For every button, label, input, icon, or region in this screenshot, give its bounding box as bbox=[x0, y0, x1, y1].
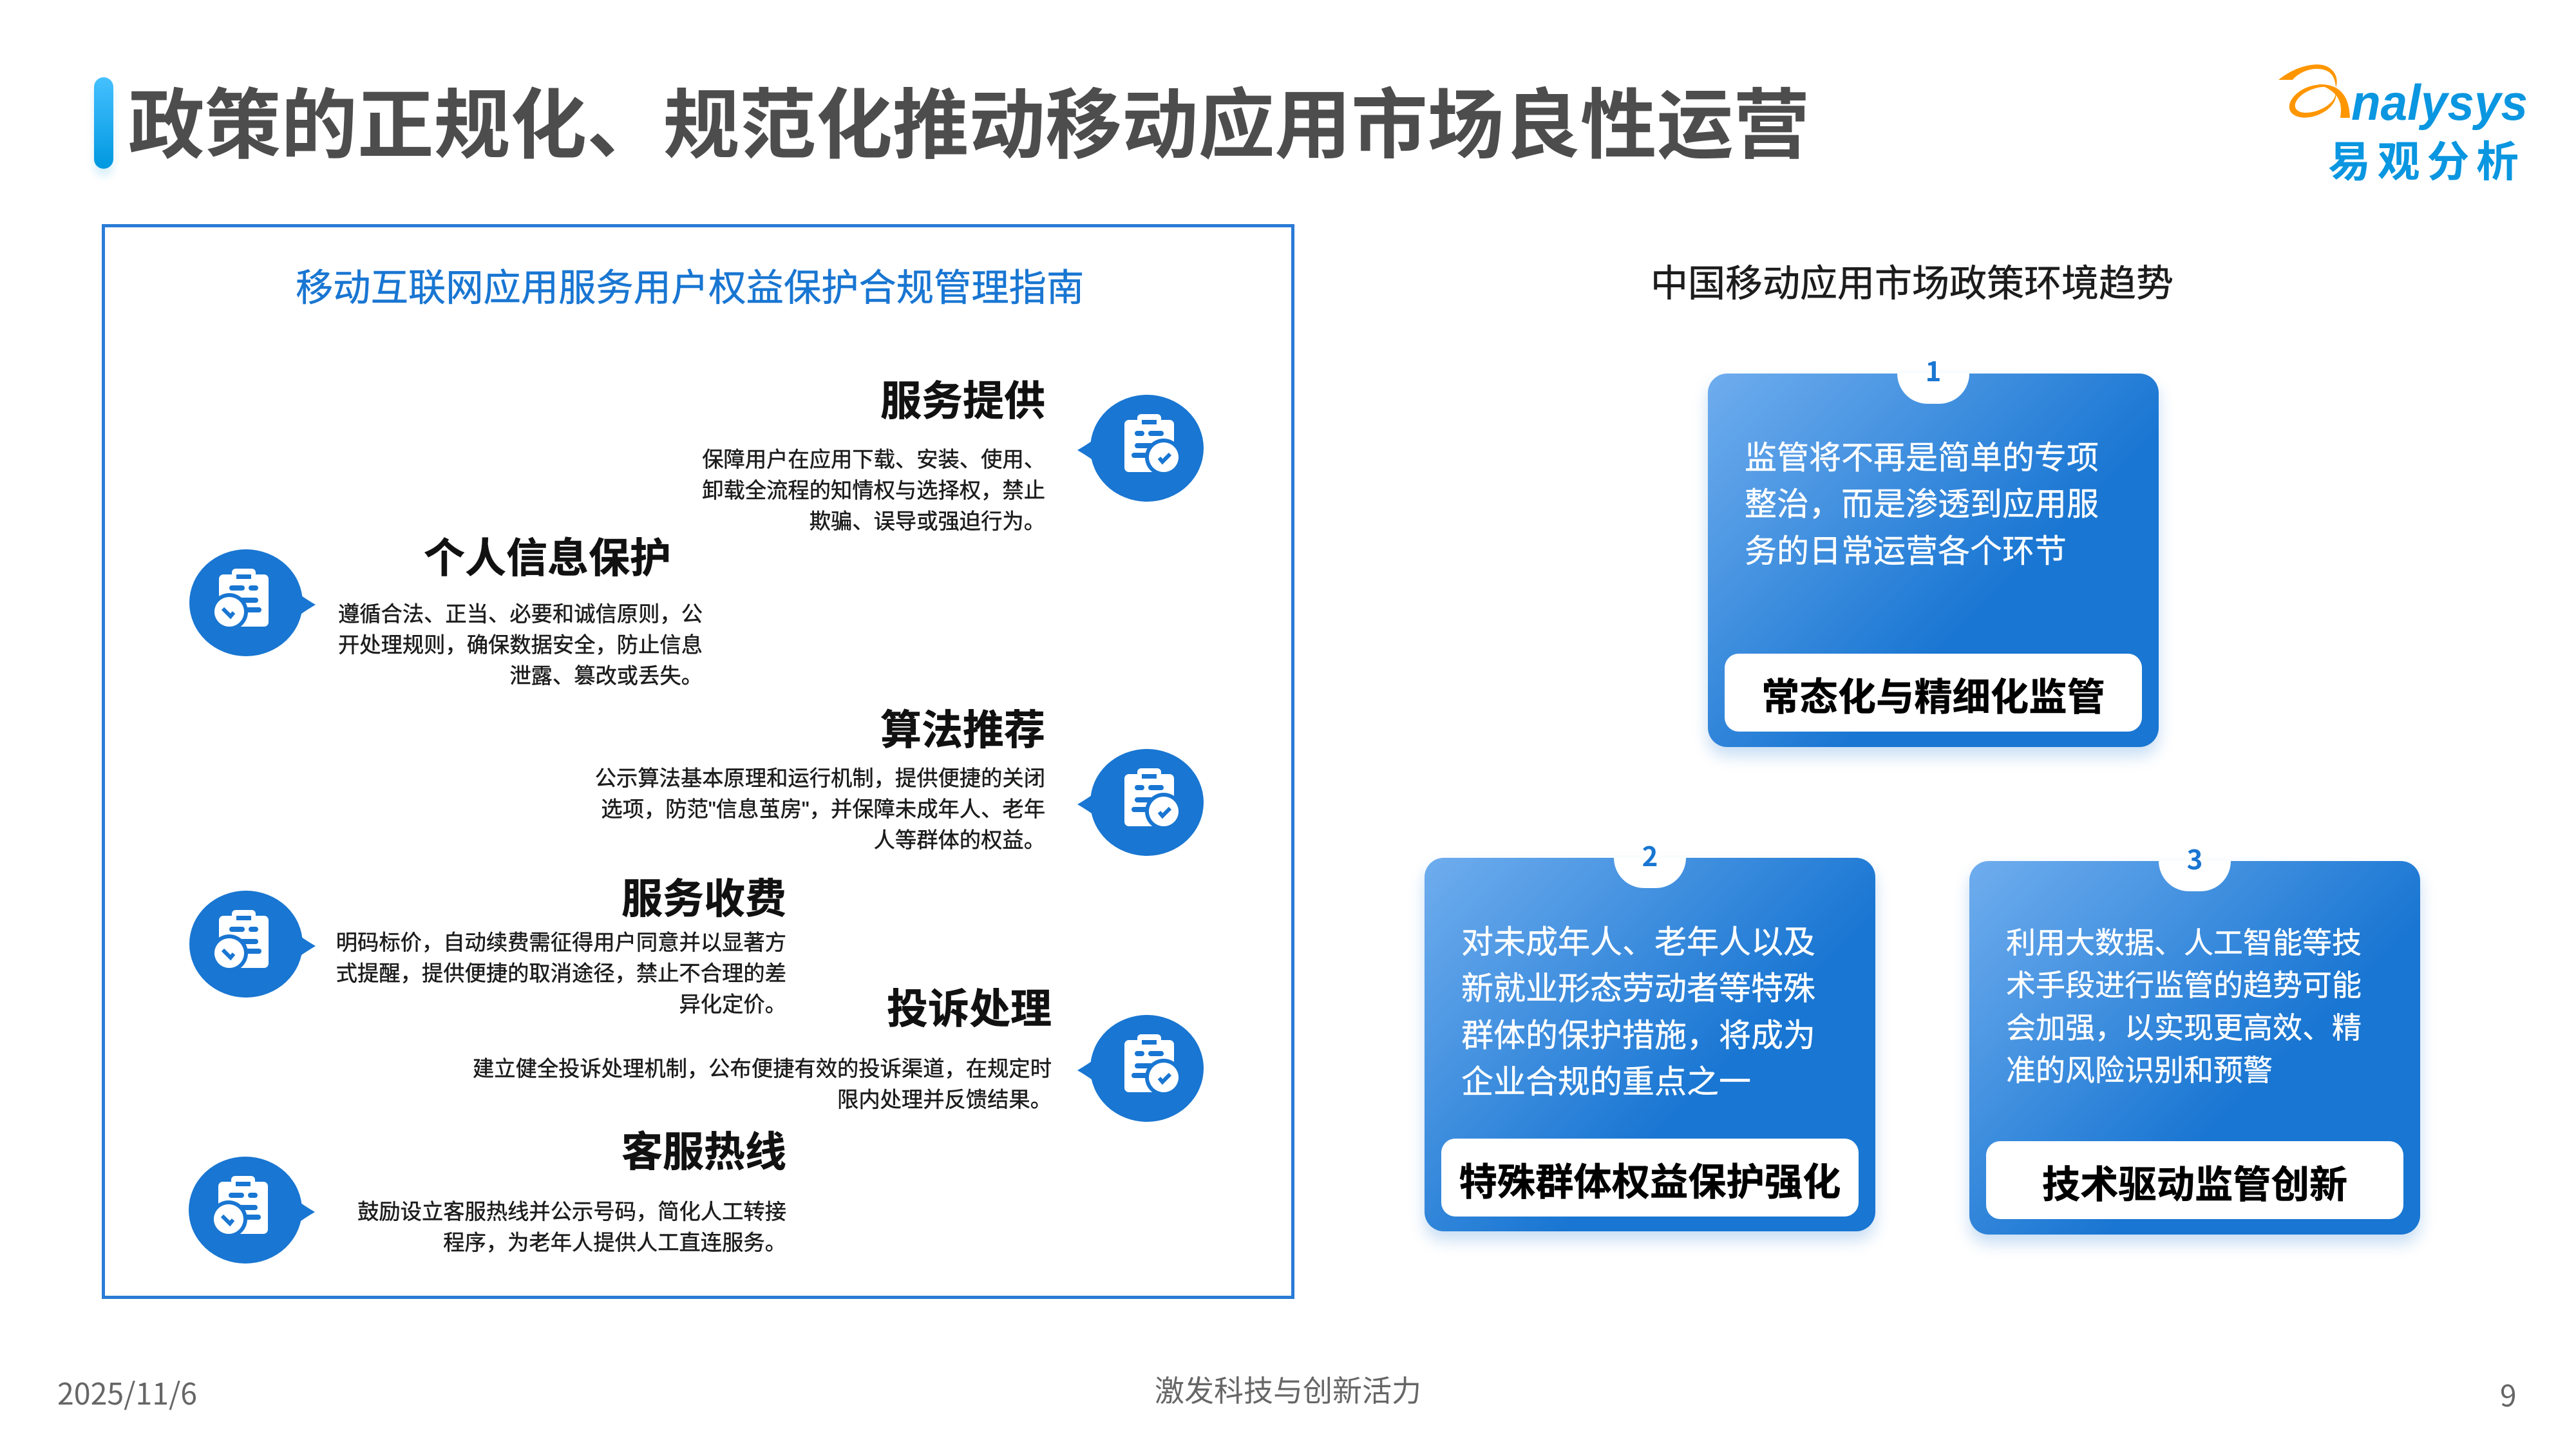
heading: 个人信息保护 bbox=[424, 535, 671, 582]
card body text: 整治，而是渗透到应用服 bbox=[1745, 486, 2099, 522]
number notch bbox=[1614, 858, 1686, 888]
card 3: 技术驱动监管创新 bbox=[1969, 861, 2420, 1235]
card body text bbox=[1461, 919, 1815, 1106]
description: 泄露、篡改或丢失。 bbox=[509, 665, 703, 688]
heading: 算法推荐 bbox=[880, 707, 1045, 753]
card body text: 新就业形态劳动者等特殊 bbox=[1461, 971, 1815, 1007]
card label: 技术驱动监管创新 bbox=[2042, 1163, 2347, 1206]
number 3: 3 bbox=[2187, 838, 2202, 878]
description: 程序，为老年人提供人工直连服务。 bbox=[443, 1231, 786, 1255]
description bbox=[335, 1197, 786, 1259]
title: 政策的正规化、规范化推动移动应用市场良性运营 bbox=[128, 84, 1810, 169]
description bbox=[335, 928, 786, 1021]
card label: 特殊群体权益保护强化 bbox=[1459, 1160, 1841, 1204]
description: 欺骗、误导或强迫行为。 bbox=[810, 510, 1045, 534]
footer date: 2025/11/6 bbox=[57, 1370, 197, 1414]
description: 人等群体的权益。 bbox=[874, 829, 1045, 853]
logo: Analysys 易观分析 bbox=[2278, 64, 2528, 185]
footer caption: 激发科技与创新活力 bbox=[1155, 1374, 1421, 1408]
card body text: 务的日常运营各个环节 bbox=[1745, 533, 2067, 569]
logo swoosh bbox=[2278, 64, 2350, 124]
item: 客服热线 bbox=[187, 1127, 789, 1269]
logo chinese name: 易观分析 bbox=[2328, 138, 2519, 185]
page number: 9 bbox=[2500, 1373, 2517, 1416]
description bbox=[580, 764, 1045, 857]
item: 个人信息保护 bbox=[189, 535, 703, 688]
card label: 常态化与精细化监管 bbox=[1761, 676, 2105, 719]
description: 限内处理并反馈结果。 bbox=[837, 1088, 1052, 1112]
card 1: 常态化与精细化监管 bbox=[1708, 374, 2159, 747]
card label bbox=[1441, 1139, 1859, 1217]
description: 开处理规则，确保数据安全，防止信息 bbox=[338, 634, 703, 658]
icon: clipboard bubble bbox=[189, 891, 316, 1001]
logo wordmark: nalysys bbox=[2351, 74, 2528, 131]
description bbox=[702, 448, 1045, 534]
number notch bbox=[1897, 374, 1969, 404]
icon: clipboard bubble bbox=[1077, 395, 1204, 502]
icon: clipboard bubble bbox=[1077, 750, 1204, 859]
description: 保障用户在应用下载、安装、使用、 bbox=[702, 448, 1045, 472]
panel heading: 移动互联网应用服务用户权益保护合规管理指南 bbox=[296, 267, 1084, 309]
icon: clipboard bubble bbox=[189, 550, 316, 659]
card body text: 准的风险识别和预警 bbox=[2006, 1054, 2273, 1087]
description: 遵循合法、正当、必要和诚信原则，公 bbox=[338, 603, 703, 627]
icon: clipboard bubble bbox=[1077, 1016, 1204, 1125]
card body text bbox=[2006, 922, 2362, 1092]
description: 明码标价，自动续费需征得用户同意并以显著方 bbox=[336, 931, 786, 955]
description: 建立健全投诉处理机制，公布便捷有效的投诉渠道，在规定时 bbox=[473, 1057, 1052, 1081]
description bbox=[334, 600, 703, 692]
icon: clipboard bubble bbox=[189, 1157, 315, 1267]
card body text: 群体的保护措施，将成为 bbox=[1461, 1018, 1815, 1054]
card label bbox=[1986, 1141, 2403, 1219]
number 1: 1 bbox=[1926, 350, 1941, 390]
heading: 服务提供 bbox=[880, 378, 1045, 424]
heading: 服务收费 bbox=[621, 876, 786, 922]
item: 投诉处理 bbox=[470, 982, 1211, 1121]
card 2: 特殊群体权益保护强化 bbox=[1425, 858, 1875, 1231]
item: 服务提供 bbox=[702, 378, 1204, 534]
description: 选项，防范"信息茧房"，并保障未成年人、老年 bbox=[601, 798, 1045, 822]
card body text bbox=[1745, 435, 2099, 574]
description: 卸载全流程的知情权与选择权，禁止 bbox=[702, 479, 1045, 503]
card body text: 利用大数据、人工智能等技 bbox=[2006, 926, 2362, 960]
item: 算法推荐 bbox=[580, 705, 1211, 863]
right section heading: 中国移动应用市场政策环境趋势 bbox=[1651, 263, 2174, 305]
card body text: 术手段进行监管的趋势可能 bbox=[2006, 969, 2362, 1002]
description: 式提醒，提供便捷的取消途径，禁止不合理的差 bbox=[336, 962, 786, 986]
heading: 客服热线 bbox=[621, 1129, 786, 1175]
title accent bar bbox=[94, 77, 113, 169]
number 2: 2 bbox=[1642, 835, 1658, 875]
heading: 投诉处理 bbox=[887, 986, 1052, 1032]
card body text: 监管将不再是简单的专项 bbox=[1745, 440, 2099, 476]
description bbox=[470, 1054, 1052, 1116]
card body text: 会加强，以实现更高效、精 bbox=[2006, 1011, 2362, 1045]
description: 鼓励设立客服热线并公示号码，简化人工转接 bbox=[357, 1200, 786, 1224]
card body text: 企业合规的重点之一 bbox=[1461, 1064, 1751, 1100]
card body text: 对未成年人、老年人以及 bbox=[1461, 924, 1815, 960]
item: 服务收费 bbox=[187, 873, 789, 1021]
number notch bbox=[2159, 861, 2231, 891]
panel: compliance guide bbox=[102, 224, 1294, 1299]
description: 公示算法基本原理和运行机制，提供便捷的关闭 bbox=[595, 767, 1045, 791]
description: 异化定价。 bbox=[679, 993, 786, 1017]
card label bbox=[1725, 654, 2142, 732]
